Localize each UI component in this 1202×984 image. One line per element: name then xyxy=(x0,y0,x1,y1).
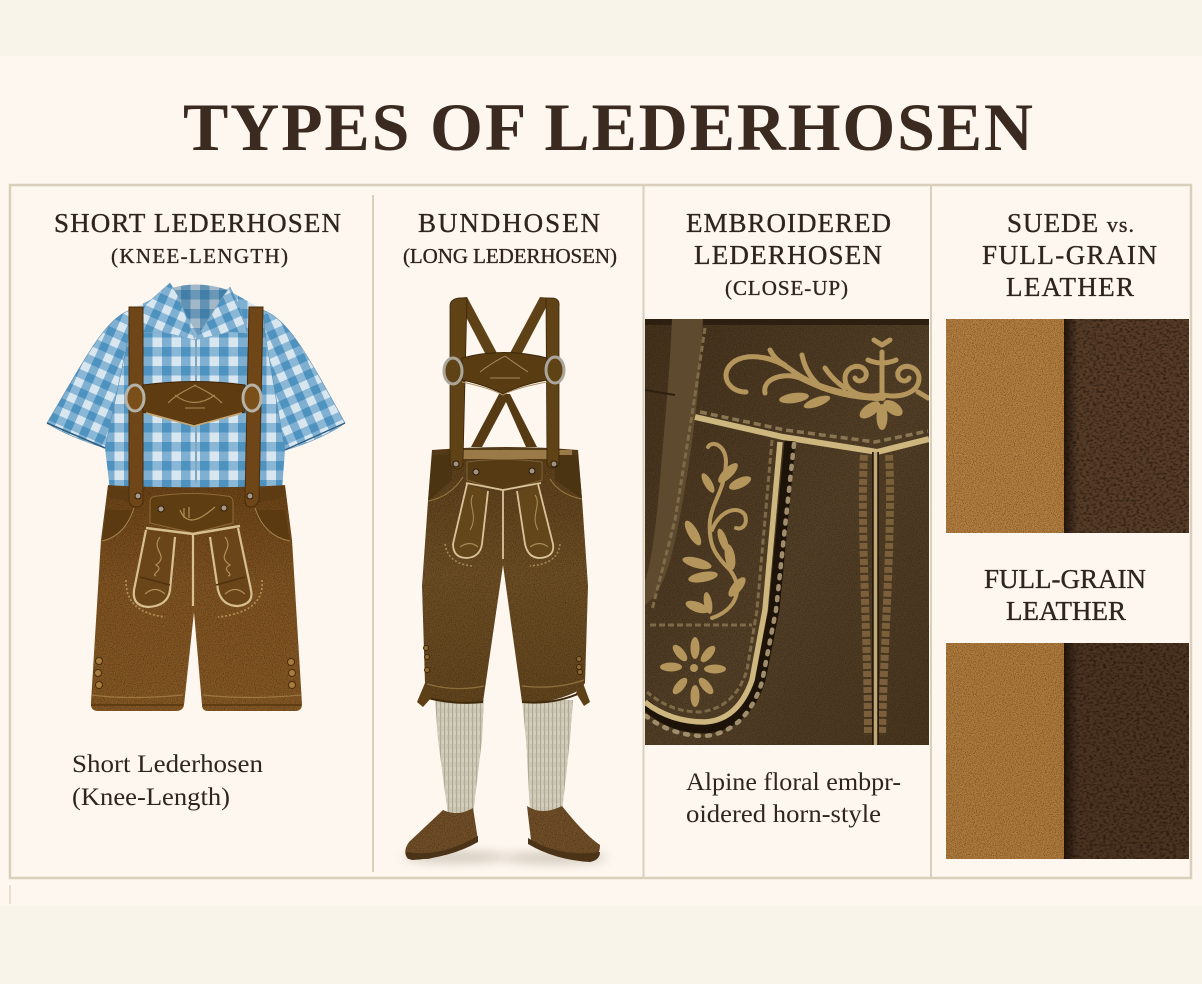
heading: suede vs full-grain: FULL-GRAIN xyxy=(982,240,1157,270)
panel: suede vs full-grain xyxy=(946,208,1189,859)
left seam band xyxy=(645,319,703,605)
heading: bundhosen: BUNDHOSEN xyxy=(418,208,600,238)
heading: embroidered lederhosen: LEDERHOSEN xyxy=(694,240,882,270)
panel: short lederhosen xyxy=(47,208,345,811)
caption: embroidered lederhosen: Alpine floral embpr- xyxy=(686,769,901,796)
caption: short lederhosen: (Knee-Length) xyxy=(72,784,230,811)
embroidery: top flourish xyxy=(726,340,928,399)
knee buttons xyxy=(94,658,296,688)
heading: short lederhosen: SHORT LEDERHOSEN xyxy=(54,208,341,238)
heading: short lederhosen: (KNEE-LENGTH) xyxy=(111,244,288,268)
infographic canvas xyxy=(8,105,1192,904)
illustration: long pants xyxy=(417,447,590,707)
illustration: long suspenders xyxy=(444,297,564,469)
waist piping and stitching xyxy=(700,412,928,442)
swatch pair: suede and full-grain top xyxy=(946,319,1189,533)
heading: embroidered lederhosen: EMBROIDERED xyxy=(686,208,891,238)
heading: embroidered lederhosen: (CLOSE-UP) xyxy=(725,276,848,300)
panel: embroidered lederhosen xyxy=(645,208,929,828)
caption: embroidered lederhosen xyxy=(686,769,901,828)
embroidery: small flower xyxy=(660,637,726,707)
swatch pair: suede and full-grain bottom xyxy=(946,643,1189,859)
flap piping and stitching xyxy=(645,441,790,728)
illustration: short lederhosen pants xyxy=(91,485,302,711)
illustration: gingham shirt xyxy=(47,283,345,490)
heading: full-grain leather: FULL-GRAIN xyxy=(984,564,1146,594)
caption: short lederhosen xyxy=(72,751,264,811)
heading: suede vs full-grain xyxy=(982,208,1157,302)
center rope seam xyxy=(863,455,890,735)
heading: embroidered lederhosen xyxy=(686,208,891,300)
caption: embroidered lederhosen: oidered horn-style xyxy=(686,801,881,828)
heading: full-grain leather: LEATHER xyxy=(1006,596,1126,626)
heading: short lederhosen xyxy=(54,208,341,268)
caption: short lederhosen: Short Lederhosen xyxy=(72,751,264,778)
embroidery: leaves xyxy=(681,391,905,616)
embroidery: side scroll xyxy=(708,444,746,618)
heading: suede vs full-grain: SUEDE vs. xyxy=(1007,208,1134,238)
panel: bundhosen xyxy=(403,208,617,864)
heading: bundhosen xyxy=(403,208,617,268)
illustration: shoes xyxy=(403,806,607,864)
heading: suede vs full-grain: LEATHER xyxy=(1006,272,1134,302)
heading: full-grain leather xyxy=(984,564,1146,626)
grid frame xyxy=(10,185,1191,904)
illustration: socks xyxy=(435,700,573,815)
heading: bundhosen: (LONG LEDERHOSEN) xyxy=(403,244,617,268)
close-up embroidery image xyxy=(645,319,929,745)
title: TYPES OF LEDERHOSEN xyxy=(183,89,1033,165)
illustration: suspenders and buckles xyxy=(126,307,263,512)
